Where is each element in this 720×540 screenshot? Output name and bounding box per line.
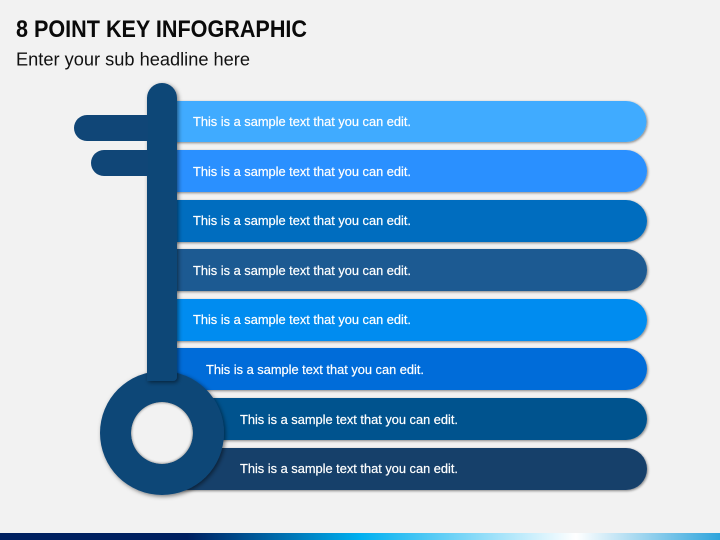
bar 4: This is a sample text that you can edit. [193,264,411,278]
key stem [147,83,177,381]
bar 5 [170,299,647,341]
bar 4 [170,249,647,291]
bar 8 [170,448,647,490]
bar 3 [170,200,647,242]
key ring [100,371,224,495]
key ring hole [130,402,194,464]
subtitle: Enter your sub headline here [16,50,250,70]
bar 8: This is a sample text that you can edit. [240,462,458,476]
bar 2: This is a sample text that you can edit. [193,165,411,179]
bar 2 [170,150,647,192]
bar 3: This is a sample text that you can edit. [193,214,411,228]
bottom gradient bar [0,533,720,540]
key tooth lower [91,150,148,176]
bar 1: This is a sample text that you can edit. [193,115,411,129]
bar 7: This is a sample text that you can edit. [240,413,458,427]
bar 1 [170,101,646,142]
bar 6 [170,348,647,390]
title: 8 POINT KEY INFOGRAPHIC [16,16,307,43]
bar 6: This is a sample text that you can edit. [206,363,424,377]
key tooth upper [74,115,148,141]
bar 5: This is a sample text that you can edit. [193,313,411,327]
icon: key [74,83,224,495]
bar 7 [170,398,647,440]
